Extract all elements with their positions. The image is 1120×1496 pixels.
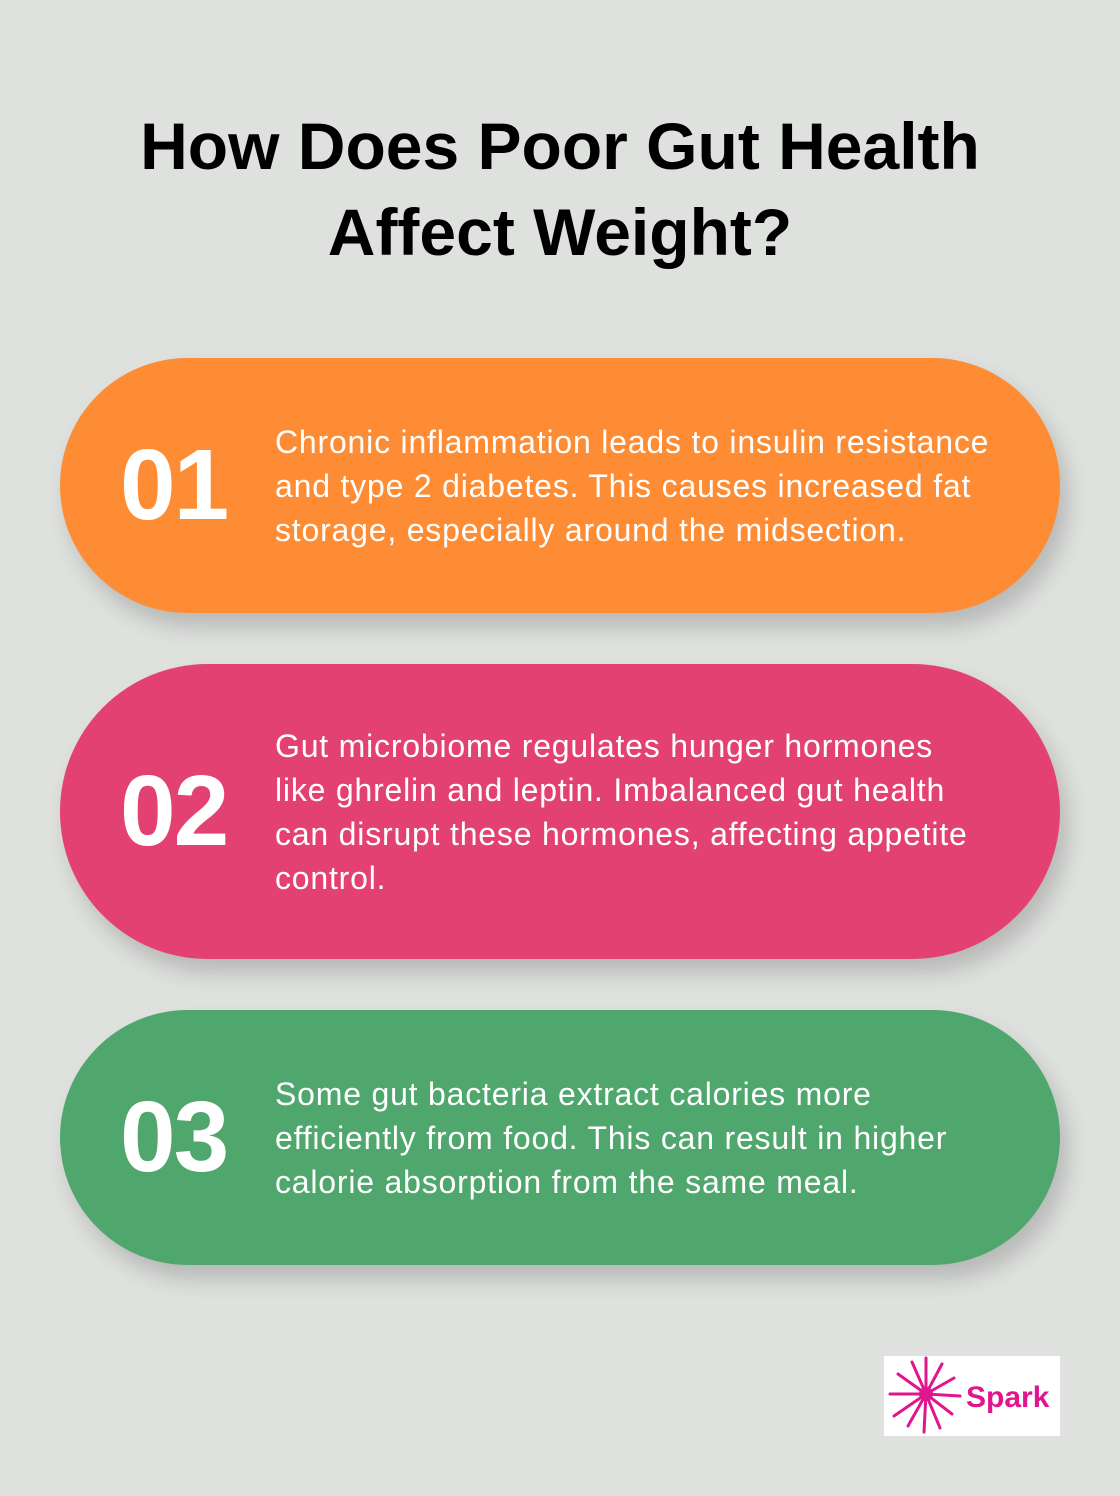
text 01: Chronic inflammation leads to insulin resistance (275, 424, 989, 460)
text 02: like ghrelin and leptin. Imbalanced gut health (275, 772, 945, 808)
text 01: and type 2 diabetes. This causes increased fat (275, 468, 971, 504)
title (140, 109, 980, 269)
number 01: 01 (120, 429, 227, 541)
text 03: Some gut bacteria extract calories more (275, 1076, 872, 1112)
text 02: can disrupt these hormones, affecting appetite (275, 816, 968, 852)
text 02: Gut microbiome regulates hunger hormones (275, 728, 933, 764)
number 03: 03 (120, 1081, 227, 1193)
text 01 (275, 424, 989, 548)
panel: point 03 (60, 1010, 1060, 1265)
logo: Spark (884, 1356, 1060, 1436)
text 01: storage, especially around the midsection. (275, 512, 906, 548)
text 02 (275, 728, 968, 896)
text 02: control. (275, 860, 386, 896)
number 02: 02 (120, 755, 227, 867)
text 03 (275, 1076, 947, 1200)
panel: point 01 (60, 358, 1060, 613)
title: How Does Poor Gut Health (140, 109, 980, 183)
icon: starburst (888, 1356, 1050, 1434)
icon: starburst: Spark (966, 1381, 1050, 1414)
text 03: efficiently from food. This can result in higher (275, 1120, 947, 1156)
panel: point 02 (60, 664, 1060, 959)
title: Affect Weight? (328, 195, 792, 269)
text 03: calorie absorption from the same meal. (275, 1164, 859, 1200)
